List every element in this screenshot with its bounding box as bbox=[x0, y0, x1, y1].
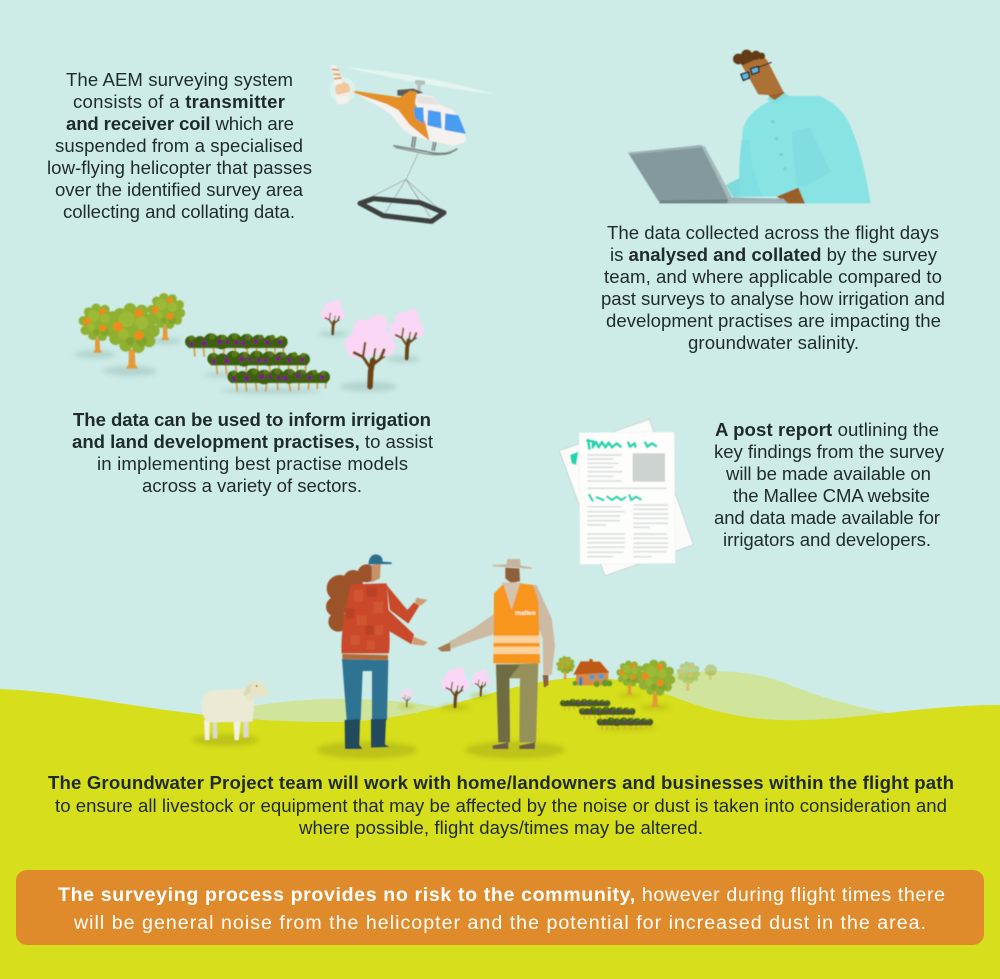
text: post report: will be made available on bbox=[725, 463, 931, 484]
text: data analysis: development practises are impacting the bbox=[606, 310, 941, 331]
text: data analysis bbox=[601, 222, 945, 353]
text: AEM surveying system: over the identified survey area bbox=[55, 179, 304, 200]
text: data analysis: is analysed and collated by the survey bbox=[610, 244, 938, 265]
callout: community risk: The surveying process provides no risk to the community, however during flight times there bbox=[58, 884, 945, 906]
text: AEM surveying system: low-flying helicopter that passes bbox=[47, 157, 312, 178]
text: AEM surveying system: collecting and collating data. bbox=[63, 201, 295, 222]
helicopter illustration bbox=[331, 65, 495, 221]
man with laptop illustration bbox=[628, 50, 871, 203]
sheep, farmers and farm scene bbox=[192, 554, 565, 759]
text: AEM surveying system: suspended from a specialised bbox=[55, 135, 303, 156]
icon: farmhouse bbox=[573, 659, 612, 687]
text: AEM surveying system: consists of a transmitter bbox=[73, 91, 285, 112]
text: AEM surveying system bbox=[47, 69, 312, 222]
text: post report: irrigators and developers. bbox=[723, 529, 931, 550]
man in safety vest bbox=[437, 559, 555, 749]
text: post report: key findings from the survey bbox=[714, 441, 945, 462]
callout: community risk: will be general noise from the helicopter and the potential for increased dust in the area. bbox=[73, 912, 926, 934]
orchard and vineyard illustration bbox=[74, 293, 424, 394]
text: using the data bbox=[72, 409, 434, 496]
text: project team bbox=[48, 772, 954, 838]
landscape: hills and ground bbox=[0, 671, 1000, 979]
text: AEM surveying system: The AEM surveying system bbox=[66, 69, 293, 90]
text: using the data: in implementing best practise models bbox=[97, 453, 408, 474]
woman farmer bbox=[326, 554, 428, 749]
text: project team: to ensure all livestock or equipment that may be affected by the noise or dust is taken into consideration and bbox=[55, 795, 947, 816]
text: post report: and data made available for bbox=[714, 507, 940, 528]
text: post report: A post report outlining the bbox=[715, 419, 939, 440]
text: data analysis: team, and where applicable compared to bbox=[604, 266, 942, 287]
text: data analysis: The data collected across the flight days bbox=[607, 222, 939, 243]
report pages illustration bbox=[559, 419, 693, 576]
text: post report: the Mallee CMA website bbox=[733, 485, 930, 506]
text: data analysis: groundwater salinity. bbox=[688, 332, 859, 353]
man in safety vest: mallee bbox=[515, 610, 536, 617]
text: post report bbox=[714, 419, 945, 550]
text: project team: where possible, flight days/times may be altered. bbox=[298, 817, 703, 838]
icon: sheep bbox=[202, 680, 269, 740]
callout: community risk bbox=[16, 870, 984, 945]
text: using the data: across a variety of sectors. bbox=[142, 475, 362, 496]
text: data analysis: past surveys to analyse how irrigation and bbox=[601, 288, 945, 309]
text: AEM surveying system: and receiver coil which are bbox=[66, 113, 294, 134]
text: using the data: and land development practises, to assist bbox=[72, 431, 434, 452]
distant farm with house, orchard and vines bbox=[556, 656, 717, 730]
text: project team: The Groundwater Project team will work with home/landowners and businesses within the flight path bbox=[48, 772, 954, 793]
text: using the data: The data can be used to inform irrigation bbox=[73, 409, 431, 430]
